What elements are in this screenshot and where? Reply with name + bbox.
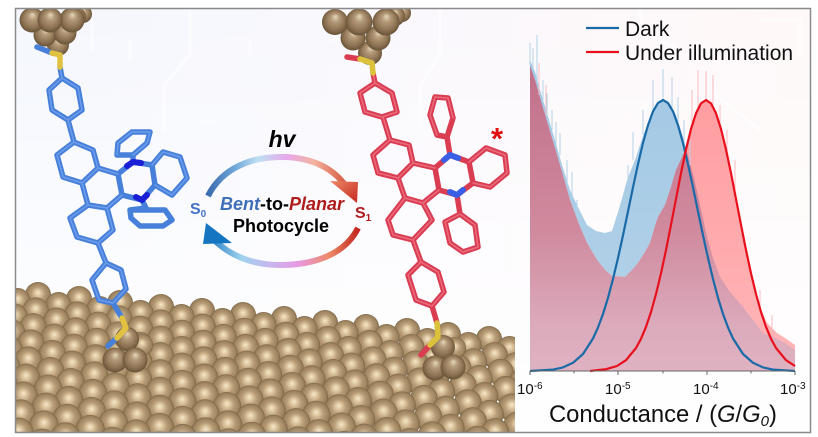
x axis tick labels: 10 [693,381,710,398]
x axis tick labels: -4 [710,381,719,392]
x axis title: ) [769,401,777,428]
x axis tick labels: -6 [534,381,543,392]
label: S1: 1 [366,213,372,224]
asterisk: * [491,121,504,156]
photocycle title [220,194,345,236]
legend: Dark [625,18,670,41]
photocycle title: Bent-to-Planar [220,194,345,214]
left gold tip cluster [20,5,92,56]
photocycle title: Photocycle [233,216,329,236]
gold adatom cluster under blue molecule [102,327,153,372]
fitted curve: dark [530,100,795,371]
label: hv: hv [269,126,297,152]
label: S0: S [190,201,201,218]
gold surface [16,270,515,432]
x axis tick labels: 10 [605,381,622,398]
conductance histogram chart [530,35,795,371]
x axis tick labels [517,381,806,398]
x axis with ticks [530,371,795,375]
fitted curve: under illumination [590,100,795,371]
red molecule, planar excited state [347,57,507,355]
x axis tick labels: 10 [780,381,797,398]
x axis title: Conductance / (G/G [549,401,761,428]
gold adatom cluster under red molecule [422,335,466,380]
x axis tick labels: -3 [797,381,806,392]
photocycle arrows [203,157,358,265]
blue molecule, bent ground state [37,47,187,346]
x axis title: 0 [761,413,770,430]
x axis tick labels: -5 [622,381,631,392]
legend [586,18,793,65]
histogram spikes: dark [530,35,690,215]
label: S0: 0 [201,209,207,220]
label: S1: S [355,205,366,222]
right gold tip cluster [322,4,411,65]
histogram: illuminated, red [530,66,795,371]
histogram: dark, blue only [530,60,795,371]
histogram spikes: illuminated [539,63,772,330]
legend: Under illumination [625,42,793,65]
x axis tick labels: 10 [517,381,534,398]
histogram: overlap of dark and illuminated [530,66,795,371]
